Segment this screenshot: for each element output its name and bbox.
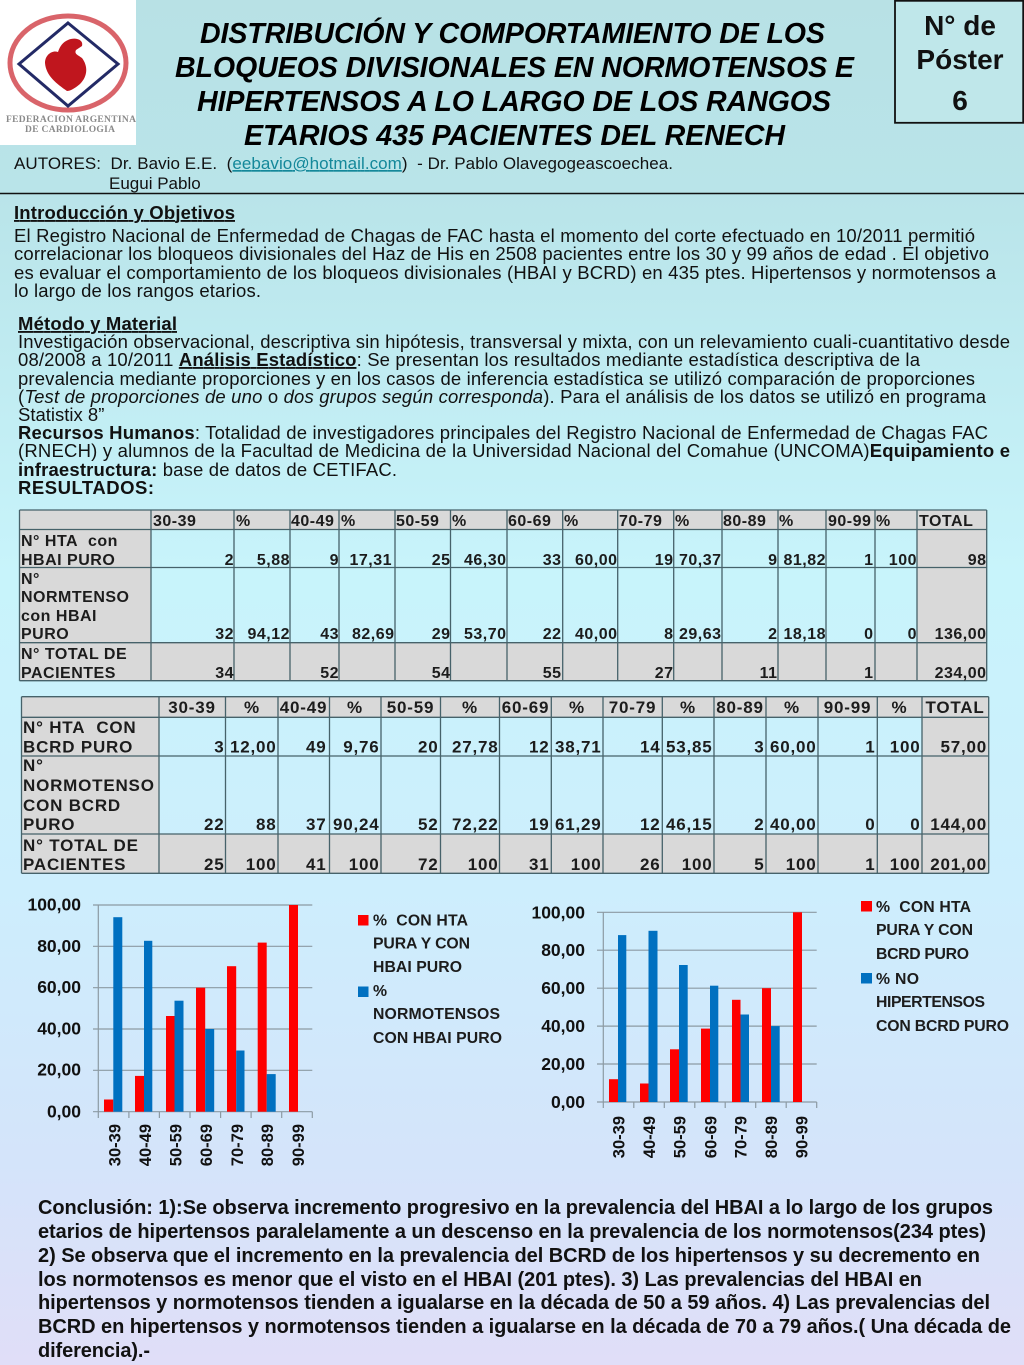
introduction and objectives: es evaluar el comportamiento de los bloqueos divisionales (HBAI y BCRD) en 435 ptes. Hipertensos y normotensos a [14, 262, 997, 283]
table 2 row: normotensive with BCRD: 22 [204, 815, 224, 834]
table 2 row: total patients: 100 [786, 855, 816, 874]
bar chart: HBAI prevalence: 80,00 [37, 936, 81, 956]
bar chart: HBAI prevalence: 20,00 [37, 1060, 81, 1080]
table 1 row: normotensive with HBAI: 43 [320, 626, 339, 643]
table 2 row: total patients: 72 [418, 855, 438, 874]
table 1 row: HTA with HBAI: 25 [432, 552, 450, 569]
method and material: 08/2008 a 10/2011 Análisis Estadístico: Se presentan los resultados mediante estadística descriptiva de la [18, 349, 921, 370]
bar chart: BCRD prevalence: 50-59 [672, 1116, 690, 1158]
table 2 row: total patients: 201,00 [930, 855, 987, 874]
table 2 row: HTA with BCRD: 49 [306, 738, 326, 756]
table 1 row: HTA with HBAI: N° HTA con [21, 533, 118, 550]
legend: HBAI chart: % [373, 983, 387, 1000]
table 1 row: HTA with HBAI: 60,00 [575, 552, 618, 569]
legend: BCRD chart [861, 899, 1009, 1035]
bar chart: HBAI prevalence: 100,00 [27, 894, 81, 914]
table 1 row: HTA with HBAI: 98 [968, 552, 986, 569]
table 1 row: normotensive with HBAI: 22 [543, 626, 562, 643]
table 1 row: normotensive with HBAI: PURO [21, 626, 69, 643]
conclusion: etarios de hipertensos paralelamente a un descenso en la prevalencia de los normotensos(234 ptes) [38, 1221, 986, 1243]
table 1 row: HTA with HBAI: 5,88 [257, 552, 290, 569]
table 1 row: total patients: 55 [543, 665, 562, 682]
table 2 row: normotensive with BCRD: 0 [910, 815, 920, 834]
bar chart: BCRD prevalence: 30-39 [610, 1116, 628, 1158]
table 1 row: HTA with HBAI: 17,31 [349, 552, 392, 569]
table 2 row: total patients: 100 [890, 855, 920, 874]
conclusion: hipertensos y normotensos tienden a igualarse en la década de 50 a 59 años. 4) Las prevalencias del [38, 1292, 990, 1314]
table 1 row: HTA with HBAI: 1 [864, 552, 874, 569]
table 2 row: normotensive with BCRD: 2 [754, 815, 764, 834]
bar chart: HBAI prevalence: 90-99 [290, 1124, 308, 1166]
table 2 row: normotensive with BCRD: 90,24 [333, 815, 380, 834]
table 1 row: total patients: 11 [760, 665, 778, 682]
table 1 row: HTA with HBAI: HBAI PURO [21, 552, 115, 569]
table 1 row: normotensive with HBAI: con HBAI [21, 608, 97, 625]
table 1 row: normotensive with HBAI: 32 [215, 626, 234, 643]
table 2 row: normotensive with BCRD: 19 [529, 815, 550, 834]
table 1 row: normotensive with HBAI: 82,69 [352, 626, 394, 643]
bar chart: BCRD prevalence: 60-69 [702, 1116, 720, 1158]
table 1 row: HTA with HBAI: 9 [768, 552, 778, 569]
table 2 row: HTA with BCRD: 12 [529, 738, 550, 756]
bar chart: BCRD prevalence: 80-89 [763, 1116, 781, 1158]
table 2 row: total patients: 41 [306, 855, 326, 874]
table 2 row: HTA with BCRD: 3 [214, 738, 224, 756]
authors: Eugui Pablo [109, 174, 201, 193]
table 2 row: normotensive with BCRD: CON BCRD [23, 796, 121, 815]
table 1 header row: % [341, 513, 356, 530]
table 2 row: total patients: 5 [754, 855, 764, 874]
bar chart: HBAI prevalence: 40,00 [37, 1018, 81, 1038]
table 1 header row: % [452, 513, 467, 530]
table 2 row: HTA with BCRD: 53,85 [666, 738, 712, 756]
table 2 header row: 70-79 [609, 698, 656, 717]
table 2 header row: % [462, 698, 478, 717]
legend: HBAI chart: HBAI PURO [373, 959, 462, 976]
table 2 header row: TOTAL [925, 698, 985, 717]
table 2 row: HTA with BCRD: 100 [890, 738, 920, 756]
table 1 row: HTA with HBAI: 19 [655, 552, 674, 569]
legend: BCRD chart: BCRD PURO [876, 946, 969, 963]
title: BLOQUEOS DIVISIONALES EN NORMOTENSOS E [175, 52, 855, 84]
poster number box [895, 1, 1023, 123]
table 2 header row: % [347, 698, 363, 717]
table 2 row: total patients: 1 [865, 855, 876, 874]
poster number box: Póster [916, 44, 1004, 75]
table 2 row: normotensive with BCRD: NORMOTENSO [23, 776, 155, 795]
bar chart: BCRD prevalence: 60,00 [541, 978, 585, 998]
table 1 row: HTA with HBAI: 81,82 [783, 552, 826, 569]
table 1 header row: 60-69 [508, 513, 551, 530]
table 1 header row: % [876, 513, 891, 530]
table 2 row: HTA with BCRD: 38,71 [555, 738, 602, 756]
logo: Federación Argentina de Cardiología [0, 0, 136, 145]
table 1 header row: % [779, 513, 794, 530]
introduction and objectives: lo largo de los rangos etarios. [14, 280, 261, 301]
bar chart: BCRD prevalence: 80,00 [541, 940, 585, 960]
bar chart: HBAI prevalence: 30-39 [106, 1124, 124, 1166]
table 1 row: normotensive with HBAI: 0 [864, 626, 874, 643]
table 2 row: HTA with BCRD: 3 [754, 738, 764, 756]
conclusion: diferencia).- [38, 1340, 150, 1362]
legend: HBAI chart: PURA Y CON [373, 936, 470, 952]
table 1 row: normotensive with HBAI: 53,70 [464, 626, 506, 643]
bar chart: HBAI prevalence: 40-49 [137, 1124, 155, 1166]
table 2 row: total patients: 100 [468, 855, 498, 874]
table 2 header row: % [680, 698, 696, 717]
title: DISTRIBUCIÓN Y COMPORTAMIENTO DE LOS [200, 16, 825, 50]
table 2 row: normotensive with BCRD: 88 [256, 815, 276, 834]
method and material: Recursos Humanos: Totalidad de investigadores principales del Registro Nacional de Enfermedad de Chagas FAC [18, 422, 988, 443]
table 2 row: normotensive with BCRD [23, 756, 987, 834]
table 2 row: normotensive with BCRD: 12 [640, 815, 660, 834]
table 1 row: normotensive with HBAI: N° [21, 571, 40, 588]
table 2 header row: % [569, 698, 585, 717]
table 1 row: normotensive with HBAI: 40,00 [575, 626, 618, 643]
bar chart: HBAI prevalence: 60-69 [198, 1124, 216, 1166]
table 2 row: HTA with BCRD: 12,00 [230, 738, 276, 756]
table 1 row: total patients: 54 [432, 665, 450, 682]
logo: Federación Argentina de Cardiología: FEDERACION ARGENTINA [6, 115, 136, 125]
title: HIPERTENSOS A LO LARGO DE LOS RANGOS [197, 86, 831, 118]
table 2 row: HTA with BCRD: 9,76 [343, 738, 380, 756]
table 2 header row [168, 698, 985, 717]
table 2 row: total patients: 31 [529, 855, 550, 874]
table 1 row: HTA with HBAI [21, 533, 986, 569]
table 2 header row: % [244, 698, 260, 717]
method and material: RESULTADOS: [18, 477, 154, 498]
title [175, 16, 855, 152]
bar chart: BCRD prevalence: 90-99 [794, 1116, 812, 1158]
table 2 row: total patients [23, 836, 987, 874]
table 2 row: total patients: 25 [204, 855, 224, 874]
bar chart: HBAI prevalence: 0,00 [47, 1102, 81, 1122]
poster number box: N° de [924, 10, 996, 41]
table 1 header row: 90-99 [828, 513, 871, 530]
table 1 row: total patients: 234,00 [935, 665, 986, 682]
table 2 row: normotensive with BCRD: 0 [865, 815, 876, 834]
table 1 header row: % [675, 513, 690, 530]
table 1 header row: 30-39 [153, 513, 196, 530]
poster number box: 6 [952, 85, 968, 116]
legend: BCRD chart: PURA Y CON [876, 922, 973, 939]
title: ETARIOS 435 PACIENTES DEL RENECH [244, 120, 786, 152]
method and material: (Test de proporciones de uno o dos grupos según corresponda). Para el análisis de los datos se utilizó en programa [18, 386, 987, 407]
table 1 header row: % [564, 513, 579, 530]
table 1 row: normotensive with HBAI: 94,12 [247, 626, 290, 643]
table 1 row: total patients: 52 [320, 665, 339, 682]
table: BCRD by age range [22, 697, 989, 874]
table 1 row: normotensive with HBAI: 136,00 [935, 626, 986, 643]
table 2 header row: 90-99 [824, 698, 871, 717]
bar chart: BCRD prevalence: 70-79 [732, 1116, 750, 1158]
legend: BCRD chart: CON BCRD PURO [876, 1018, 1009, 1035]
bar chart: HBAI prevalence: 80-89 [259, 1124, 277, 1166]
conclusion: los normotensos es menor que el visto en el HBAI (201 ptes). 3) Las prevalencias del HBAI en [38, 1269, 922, 1291]
table 2 row: HTA with BCRD: 1 [865, 738, 876, 756]
introduction and objectives: El Registro Nacional de Enfermedad de Chagas de FAC hasta el momento del corte efectuado en 10/2011 permitió [14, 225, 975, 246]
table 2 row: total patients: 100 [349, 855, 380, 874]
table 1 row: total patients: N° TOTAL DE [21, 646, 127, 663]
table 2 row: total patients: 100 [571, 855, 602, 874]
method and material: (RNECH) y alumnos de la Facultad de Medicina de la Universidad Nacional del Comahue (UNCOMA)Equipamiento e [18, 440, 1010, 461]
conclusion: 2) Se observa que el incremento en la prevalencia del BCRD de los hipertensos y su decremento en [38, 1245, 980, 1267]
table 1 header row [153, 513, 973, 530]
table 2 row: HTA with BCRD: 27,78 [452, 738, 498, 756]
legend: BCRD chart: % NO [876, 971, 919, 988]
table 2 row: HTA with BCRD: 20 [418, 738, 438, 756]
bar chart: HBAI prevalence: 60,00 [37, 977, 81, 997]
table 2 row: HTA with BCRD: 57,00 [940, 738, 987, 756]
table 2 header row: 50-59 [387, 698, 434, 717]
method and material: prevalencia mediante proporciones y en los casos de inferencia estadística se utilizó comparación de proporciones [18, 368, 975, 389]
introduction and objectives: Introducción y Objetivos [14, 202, 235, 223]
table 1 row: normotensive with HBAI: 29,63 [679, 626, 722, 643]
legend: HBAI chart: % CON HTA [373, 912, 468, 930]
table 1 row: total patients [21, 646, 986, 682]
table 2 row: normotensive with BCRD: 40,00 [770, 815, 816, 834]
table 2 row: total patients: PACIENTES [23, 855, 126, 874]
bar chart: BCRD prevalence [531, 902, 817, 1158]
table 1 row: normotensive with HBAI: 18,18 [783, 626, 826, 643]
table 1 row: HTA with HBAI: 70,37 [679, 552, 722, 569]
table 2 header row: 30-39 [168, 698, 216, 717]
table 2 header row: % [784, 698, 800, 717]
table 1 row: HTA with HBAI: 46,30 [464, 552, 506, 569]
table 2 row: total patients: N° TOTAL DE [23, 836, 139, 855]
table 2 header row: % [892, 698, 907, 717]
table 2 header row: 40-49 [280, 698, 327, 717]
table 2 row: HTA with BCRD: N° HTA CON [23, 718, 136, 737]
table 1 row: normotensive with HBAI: 2 [768, 626, 778, 643]
table 2 row: normotensive with BCRD: 72,22 [452, 815, 498, 834]
conclusion [38, 1197, 1011, 1362]
table 1 row: normotensive with HBAI: 29 [432, 626, 450, 643]
bar chart: BCRD prevalence: 40,00 [541, 1016, 585, 1036]
table: HBAI by age range [20, 510, 987, 682]
table 2 row: normotensive with BCRD: 46,15 [666, 815, 712, 834]
method and material: Método y Material [18, 313, 177, 334]
table 2 row: normotensive with BCRD: 52 [418, 815, 438, 834]
table 1 row: HTA with HBAI: 33 [543, 552, 562, 569]
table 1 header row: % [236, 513, 251, 530]
table 1 row: total patients: PACIENTES [21, 665, 116, 682]
conclusion: Conclusión: 1):Se observa incremento progresivo en la prevalencia del HBAI a lo largo de los grupos [38, 1197, 993, 1219]
legend: HBAI chart [358, 912, 502, 1047]
legend: HBAI chart: NORMOTENSOS [373, 1006, 500, 1023]
method and material [18, 313, 1010, 498]
table 1 row: normotensive with HBAI: 8 [664, 626, 674, 643]
conclusion: BCRD en hipertensos y normotensos tienden a igualarse en la década de 70 a 79 años.( Una década de [38, 1316, 1011, 1338]
table 1 header row: TOTAL [919, 513, 973, 530]
legend: HBAI chart: CON HBAI PURO [373, 1030, 502, 1047]
table 2 row: total patients: 100 [682, 855, 712, 874]
table 2 row: normotensive with BCRD: PURO [23, 815, 75, 834]
table 2 row: normotensive with BCRD: 37 [306, 815, 326, 834]
method and material: infraestructura: base de datos de CETIFAC. [18, 459, 397, 480]
table 1 row: HTA with HBAI: 100 [889, 552, 917, 569]
authors: AUTORES: Dr. Bavio E.E. (eebavio@hotmail.com) - Dr. Pablo Olavegogeascoechea. [14, 154, 673, 173]
table 1 header row: 40-49 [291, 513, 334, 530]
introduction and objectives: correlacionar los bloqueos divisionales del Haz de His en 2508 pacientes entre los 30 y 99 años de edad . El objetivo [14, 243, 989, 264]
bar chart: HBAI prevalence [27, 894, 312, 1166]
table 1 header row: 70-79 [619, 513, 662, 530]
table 1 header row: 50-59 [396, 513, 439, 530]
table 2 row: normotensive with BCRD: 61,29 [555, 815, 602, 834]
bar chart: BCRD prevalence: 100,00 [531, 902, 585, 922]
table 2 header row: 80-89 [716, 698, 764, 717]
table 2 header row: 60-69 [502, 698, 549, 717]
table 1 row: HTA with HBAI: 2 [225, 552, 234, 569]
introduction and objectives [14, 202, 997, 301]
table 2 row: HTA with BCRD: 60,00 [770, 738, 816, 756]
table 2 row: HTA with BCRD: 14 [640, 738, 660, 756]
authors [14, 154, 673, 193]
bar chart: BCRD prevalence: 40-49 [641, 1116, 659, 1158]
bar chart: HBAI prevalence: 50-59 [168, 1124, 186, 1166]
table 1 row: total patients: 27 [655, 665, 674, 682]
table 1 header row: 80-89 [723, 513, 766, 530]
bar chart: BCRD prevalence: 20,00 [541, 1054, 585, 1074]
table 2 row: HTA with BCRD [23, 718, 987, 756]
legend: BCRD chart: HIPERTENSOS [876, 994, 985, 1011]
table 2 row: normotensive with BCRD: N° [23, 756, 44, 775]
table 2 row: total patients: 100 [246, 855, 276, 874]
table 1 row: normotensive with HBAI [21, 571, 986, 643]
bar chart: HBAI prevalence: 70-79 [229, 1124, 247, 1166]
table 1 row: total patients: 1 [864, 665, 874, 682]
legend: BCRD chart: % CON HTA [876, 899, 971, 916]
logo: Federación Argentina de Cardiología: DE CARDIOLOGIA [25, 125, 115, 135]
table 1 row: normotensive with HBAI: NORMTENSO [21, 589, 130, 606]
method and material: Statistix 8” [18, 404, 104, 425]
table 2 row: normotensive with BCRD: 144,00 [930, 815, 987, 834]
table 2 row: total patients: 26 [640, 855, 660, 874]
table 1 row: HTA with HBAI: 9 [330, 552, 339, 569]
table 1 row: normotensive with HBAI: 0 [908, 626, 917, 643]
method and material: Investigación observacional, descriptiva sin hipótesis, transversal y mixta, con un relevamiento cuali-cuantitativo desde [18, 331, 1010, 352]
table 1 row: total patients: 34 [215, 665, 234, 682]
table 2 row: HTA with BCRD: BCRD PURO [23, 738, 133, 756]
bar chart: BCRD prevalence: 0,00 [551, 1092, 585, 1112]
